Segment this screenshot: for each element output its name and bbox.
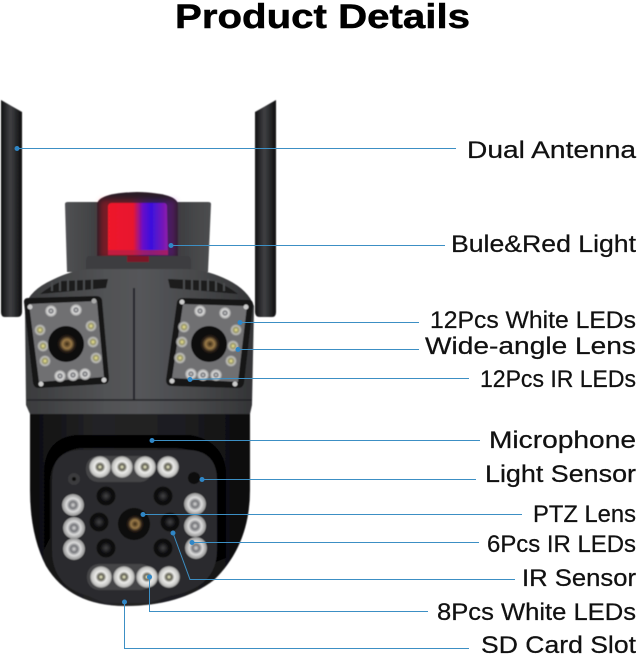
left IR LEDs [62, 494, 85, 560]
leader: Light Sensor [200, 477, 476, 482]
label: IR Sensor: IR Sensor [522, 565, 636, 592]
PTZ lens [118, 508, 150, 540]
cooling vents [40, 279, 238, 294]
leader: Wide-angle Lens [236, 347, 419, 352]
label: 12Pcs White LEDs: 12Pcs White LEDs [430, 307, 636, 334]
upper camera housing [25, 269, 254, 414]
leader: Dual Antenna [14, 146, 456, 151]
label: Microphone: Microphone [489, 427, 636, 454]
front module recess [44, 435, 226, 562]
label: Dual Antenna: Dual Antenna [467, 137, 637, 164]
leader: SD Card Slot [122, 600, 469, 648]
leader: 12Pcs IR LEDs [188, 377, 469, 382]
leader: 8Pcs White LEDs [147, 574, 428, 612]
label: Wide-angle Lens: Wide-angle Lens [425, 333, 636, 360]
label: PTZ Lens: PTZ Lens [533, 501, 636, 528]
right camera module [166, 298, 253, 388]
camera illustration [1, 100, 276, 606]
back mounting plate [65, 202, 211, 272]
IR sensors [89, 486, 180, 558]
light base collar [86, 256, 191, 272]
label: 8Pcs White LEDs: 8Pcs White LEDs [437, 599, 636, 626]
leader: 12Pcs White LEDs [238, 320, 419, 325]
icon: left antenna [1, 100, 22, 317]
icon: right antenna [255, 100, 276, 317]
bottom white LEDs [90, 566, 180, 588]
lower dome [30, 414, 250, 606]
leader: 6Pcs IR LEDs [190, 540, 479, 545]
label: Bule&Red Light: Bule&Red Light [451, 231, 636, 258]
leader: Blue and Red Light [168, 243, 445, 248]
top white LEDs [89, 456, 179, 478]
leader: IR Sensor [170, 530, 515, 580]
leader: Microphone [150, 438, 480, 443]
front square module [52, 450, 217, 603]
label: Light Sensor: Light Sensor [485, 461, 636, 488]
right IR LEDs [184, 493, 207, 559]
leader: PTZ Lens [140, 512, 522, 517]
left camera module [24, 296, 109, 388]
icon: blue and red warning light [97, 192, 178, 258]
label: 6Pcs IR LEDs: 6Pcs IR LEDs [487, 531, 636, 558]
